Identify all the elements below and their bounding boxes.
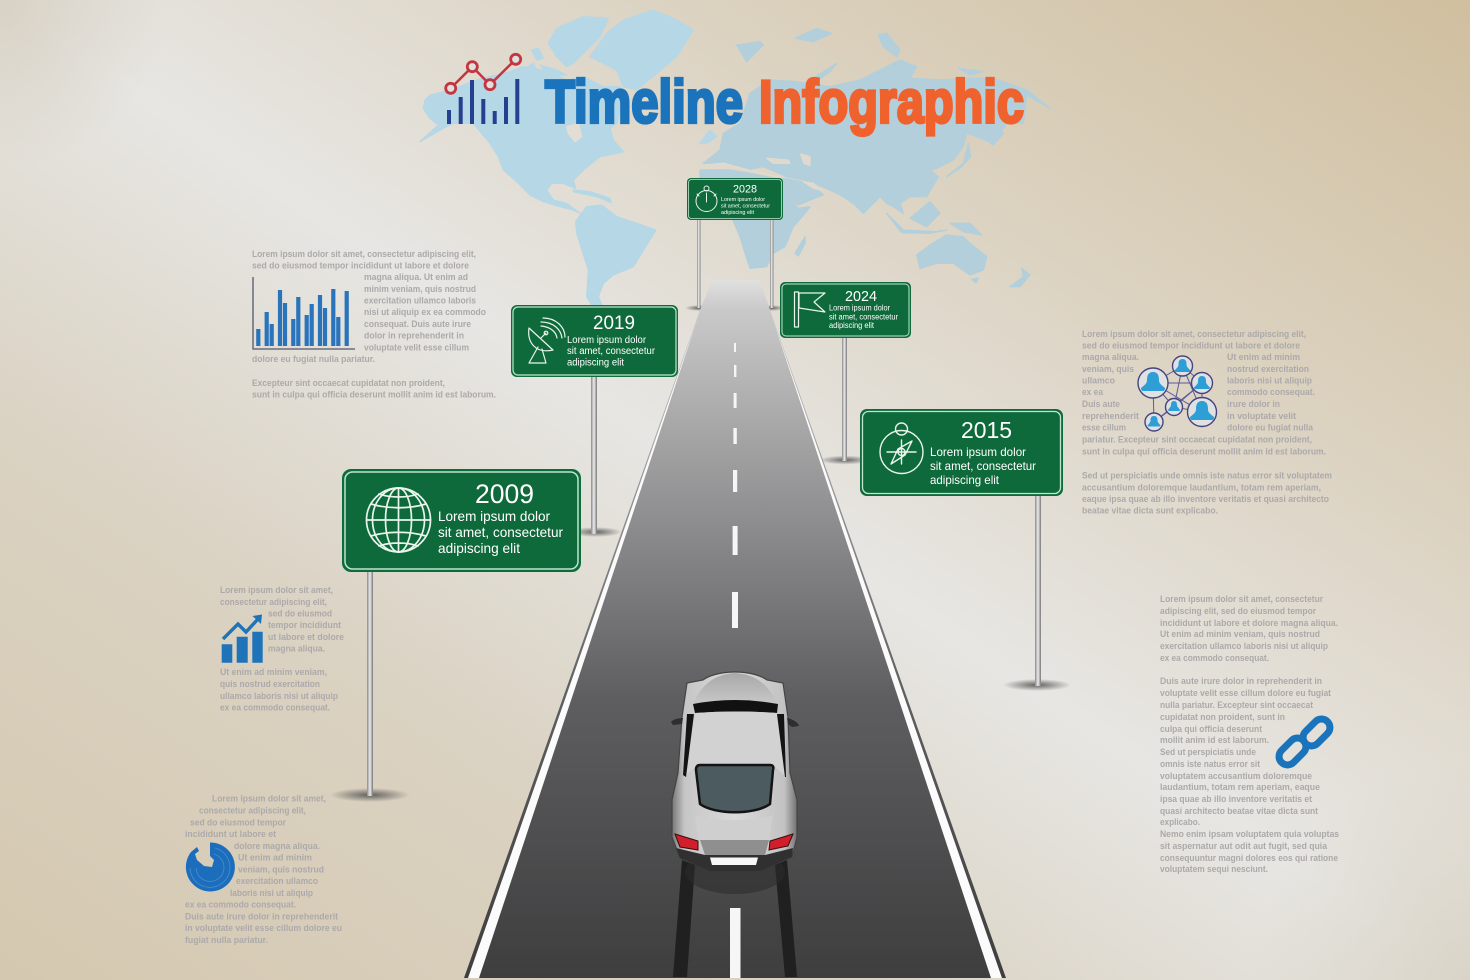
text block: top left: magna aliqua. Ut enim ad [364, 271, 468, 282]
text block: lower right: ipsa quae ab illo inventore veritatis et [1160, 793, 1312, 804]
sign: 2015: sit amet, consectetur [930, 459, 1036, 473]
text block: upper right: sunt in culpa qui officia deserunt mollit anim id est laborum. [1082, 446, 1326, 456]
text block: upper right [1082, 328, 1332, 516]
text block: bottom left: Duis aute irure dolor in reprehenderit [185, 910, 338, 922]
icon: satellite dish [529, 318, 565, 363]
text block: upper right: pariatur. Excepteur sint occaecat cupidatat non proident, [1082, 434, 1312, 444]
sign: 2024 [780, 282, 911, 338]
rear window [696, 765, 773, 812]
text block: lower right: voluptatem sequi nesciunt. [1160, 863, 1268, 874]
sign: 2009: Lorem ipsum dolor [438, 508, 550, 524]
text block: upper right: beatae vitae dicta sunt explicabo. [1082, 504, 1218, 516]
text block: top left: Excepteur sint occaecat cupidatat non proident, [252, 377, 445, 388]
text block: lower right: omnis iste natus error sit [1160, 758, 1260, 769]
text block: upper right: reprehenderit [1082, 410, 1139, 421]
text block: upper right: Ut enim ad minim [1227, 351, 1300, 362]
windshield [693, 700, 778, 713]
text block: lower right: consequuntur magni dolores eos qui ratione [1160, 852, 1338, 863]
sign: 2024: 2024 [845, 288, 877, 305]
text block: upper right: dolore eu fugiat nulla [1227, 422, 1314, 432]
text block: top left: dolore eu fugiat nulla pariatur. [252, 353, 375, 364]
text block: left middle: consectetur adipiscing elit, [220, 596, 327, 607]
icon: bar chart [253, 277, 355, 349]
icon: chain link [1276, 716, 1333, 768]
sign: 2028: Lorem ipsum dolor [721, 197, 765, 203]
sign: 2015: adipiscing elit [930, 473, 1000, 487]
text block: bottom left: ex ea commodo consequat. [185, 898, 296, 910]
text block: lower right: sit aspernatur aut odit aut fugit, sed quia [1160, 840, 1328, 851]
text block: upper right: veniam, quis [1082, 363, 1134, 374]
side windows [683, 714, 786, 777]
sign: 2015: 2015 [961, 417, 1012, 443]
text block: bottom left: sed do eiusmod tempor [190, 816, 286, 828]
text block: left middle: ullamco laboris nisi ut aliquip [220, 690, 338, 701]
icon: radial pie [186, 842, 235, 891]
text block: left middle: ut labore et dolore [268, 631, 344, 642]
text block: left middle: ex ea commodo consequat. [220, 702, 330, 712]
text block: lower right: Duis aute irure dolor in reprehenderit in [1160, 675, 1322, 686]
sign: 2028: 2028 [733, 184, 757, 196]
text block: lower right: voluptate velit esse cillum dolore eu fugiat [1160, 687, 1331, 698]
text block: lower right: voluptatem accusantium doloremque [1160, 770, 1312, 781]
text block: bottom left [185, 792, 342, 945]
text block: lower right: quasi architecto beatae vitae dicta sunt [1160, 805, 1318, 816]
text block: lower right: exercitation ullamco laboris nisi ut aliquip [1160, 640, 1328, 651]
text block: lower right: cupidatat non proident, sunt in [1160, 711, 1285, 722]
lower bumper [676, 848, 793, 871]
text block: top left: sunt in culpa qui officia deserunt mollit anim id est laborum. [252, 388, 496, 400]
icon: growth chart [222, 614, 263, 663]
text block: top left: dolor in reprehenderit in [364, 330, 464, 340]
mirrors [671, 718, 799, 727]
text block: top left: Lorem ipsum dolor sit amet, consectetur adipiscing elit, [252, 248, 476, 259]
text block: top left: exercitation ullamco laboris [364, 294, 476, 306]
sign: 2009 [342, 469, 581, 572]
text block: upper right: Duis aute [1082, 398, 1120, 409]
map: Old World [700, 28, 1050, 287]
text block: left middle: magna aliqua. [268, 642, 325, 654]
title: Infographic [759, 68, 1024, 136]
text block: left middle [220, 584, 344, 712]
roof [684, 712, 786, 777]
text block: upper right: laboris nisi ut aliquip [1227, 374, 1312, 386]
car body [672, 672, 797, 870]
text block: upper right: esse cillum [1082, 422, 1126, 432]
sign: 2015: Lorem ipsum dolor [930, 445, 1026, 459]
text block: top left: consequat. Duis aute irure [364, 318, 471, 329]
text block: lower right: Sed ut perspiciatis unde [1160, 746, 1256, 757]
road [464, 280, 1006, 978]
text block: lower right: Lorem ipsum dolor sit amet, consectetur [1160, 593, 1323, 604]
text block: bottom left: exercitation ullamco [236, 875, 318, 886]
sign: 2019: sit amet, consectetur [567, 346, 656, 357]
text block: lower right: Ut enim ad minim veniam, quis nostrud [1160, 628, 1320, 639]
road centre dashes [730, 343, 740, 978]
text block: lower right: Nemo enim ipsam voluptatem quia voluptas [1160, 828, 1339, 839]
text block: bottom left: Ut enim ad minim [238, 852, 312, 862]
text block: lower right: adipiscing elit, sed do eiusmod tempor [1160, 605, 1316, 616]
text block: upper right: commodo consequat. [1227, 386, 1315, 397]
sign: 2015 [860, 409, 1063, 496]
text block: bottom left: consectetur adipiscing elit, [199, 804, 306, 816]
title: Timeline [545, 68, 743, 136]
title icon: chart [446, 54, 521, 124]
sign: 2019 [511, 305, 678, 377]
text block: upper right: Sed ut perspiciatis unde omnis iste natus error sit voluptatem [1082, 470, 1332, 480]
sign: 2028: adipiscing elit [721, 210, 754, 216]
map: inland seas [767, 154, 822, 190]
text block: lower right: nulla pariatur. Excepteur sint occaecat [1160, 699, 1313, 710]
text block: top left [252, 248, 496, 400]
sign: 2028: sit amet, consectetur [721, 204, 770, 210]
sign: 2019: adipiscing elit [567, 358, 624, 368]
text block: top left: voluptate velit esse cillum [364, 342, 469, 352]
text block: top left: sed do eiusmod tempor incididunt ut labore et dolore [252, 260, 469, 270]
text block: lower right [1160, 593, 1339, 874]
text block: lower right: incididunt ut labore et dolore magna aliqua. [1160, 617, 1338, 628]
sign: 2009: sit amet, consectetur [438, 524, 563, 540]
sign: 2024: adipiscing elit [829, 321, 875, 330]
sign: 2024: sit amet, consectetur [829, 312, 898, 322]
sign: 2009: adipiscing elit [438, 540, 520, 556]
icon: flag [794, 292, 825, 327]
sign: 2019: Lorem ipsum dolor [567, 335, 647, 346]
text block: bottom left: fugiat nulla pariatur. [185, 934, 268, 945]
tail lights [675, 834, 793, 850]
text block: bottom left: laboris nisi ut aliquip [230, 887, 313, 898]
text block: upper right: nostrud exercitation [1227, 363, 1309, 374]
text block: top left: nisi ut aliquip ex ea commodo [364, 306, 486, 317]
text block: upper right: in voluptate velit [1227, 410, 1296, 421]
text block: upper right: accusantium doloremque laudantium, totam rem aperiam, [1082, 482, 1321, 492]
text block: lower right: culpa qui officia deserunt [1160, 723, 1262, 734]
map: Americas [420, 10, 717, 305]
text block: upper right: eaque ipsa quae ab illo inventore veritatis et quasi architecto [1082, 493, 1329, 504]
text block: upper right: magna aliqua. [1082, 351, 1139, 362]
icon: stopwatch [696, 186, 717, 212]
text block: left middle: Lorem ipsum dolor sit amet, [220, 584, 333, 595]
text block: upper right: sed do eiusmod tempor incididunt ut labore et dolore [1082, 340, 1300, 350]
trunk [695, 815, 773, 855]
text block: bottom left: veniam, quis nostrud [238, 864, 324, 874]
hood [693, 673, 777, 705]
sign posts and ground shadows [330, 218, 1071, 802]
text block: bottom left: in voluptate velit esse cillum dolore eu [185, 922, 342, 933]
text block: bottom left: incididunt ut labore et [185, 828, 276, 839]
sign: 2019: 2019 [593, 313, 635, 334]
skid marks [673, 860, 797, 977]
world map [420, 10, 1050, 305]
text block: top left: minim veniam, quis nostrud [364, 283, 476, 294]
sign: 2024: Lorem ipsum dolor [829, 304, 890, 312]
text block: upper right: ullamco [1082, 374, 1115, 386]
text block: upper right: ex ea [1082, 386, 1104, 397]
sign: 2028 [687, 178, 783, 220]
car [671, 672, 799, 977]
car shadow [685, 850, 785, 894]
text block: left middle: sed do eiusmod [268, 608, 332, 618]
number plate [710, 858, 758, 865]
text block: lower right: mollit anim id est laborum. [1160, 734, 1269, 745]
map: Hudson Bay [567, 123, 582, 142]
text block: bottom left: Lorem ipsum dolor sit amet, [212, 792, 326, 804]
text block: lower right: laudantium, totam rem aperiam, eaque [1160, 781, 1320, 792]
text block: left middle: tempor incididunt [268, 619, 341, 630]
text block: lower right: explicabo. [1160, 816, 1200, 827]
sign: 2009: 2009 [475, 479, 534, 509]
text block: upper right: Lorem ipsum dolor sit amet, consectetur adipiscing elit, [1082, 328, 1306, 339]
icon: globe [366, 488, 430, 552]
icon: compass [880, 423, 923, 474]
title [545, 68, 1024, 136]
road edge lines [468, 320, 1002, 978]
text block: left middle: Ut enim ad minim veniam, [220, 666, 327, 677]
text block: lower right: ex ea commodo consequat. [1160, 652, 1269, 663]
text block: bottom left: dolore magna aliqua. [234, 840, 320, 851]
icon: people network [1138, 356, 1216, 431]
text block: left middle: quis nostrud exercitation [220, 678, 320, 689]
text block: upper right: irure dolor in [1227, 398, 1280, 409]
